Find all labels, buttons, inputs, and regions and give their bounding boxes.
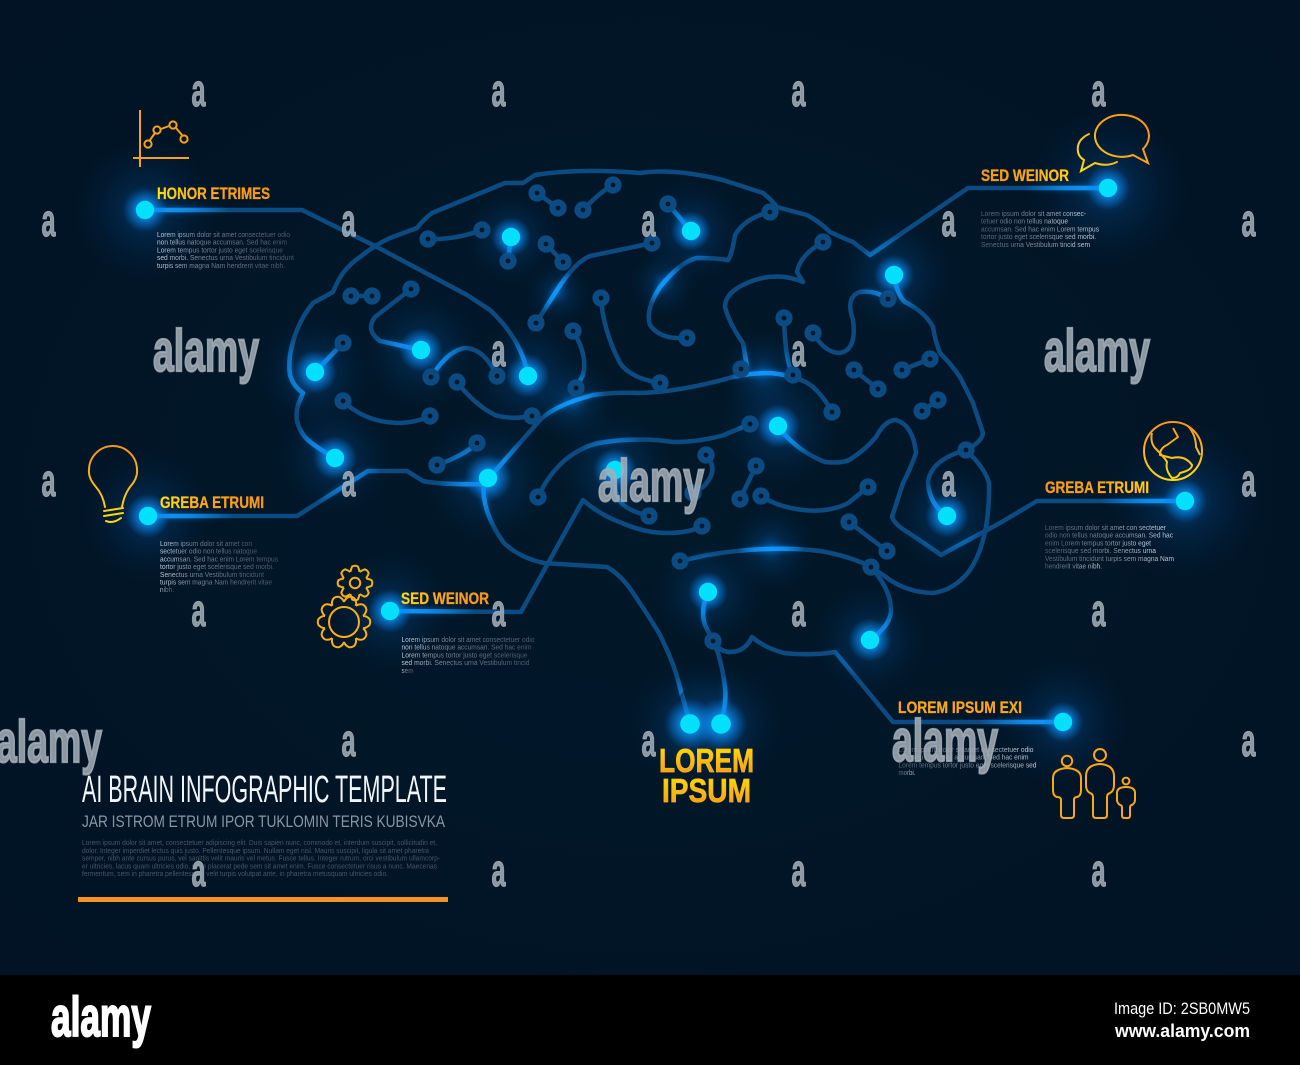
- heading: LOREM IPSUM EXI: [898, 699, 1022, 717]
- watermark: a: [792, 65, 806, 116]
- watermark: a: [342, 715, 356, 766]
- watermark: alamy: [598, 448, 704, 514]
- icon: people: [1053, 749, 1135, 818]
- watermark: alamy: [892, 708, 998, 774]
- text block: non tellus natoque accumsan. Sed hac enim: [898, 755, 1029, 762]
- watermark: a: [642, 715, 656, 766]
- orange rule: [78, 897, 448, 902]
- text block: accumsan. Sed hac enim Lorem tempus: [160, 556, 279, 563]
- text block: sectetuer odio non tellus natoque: [160, 549, 257, 556]
- text block: hendrerit vitae nibh.: [1045, 564, 1102, 570]
- text block: Lorem ipsum dolor sit amet con: [160, 541, 252, 548]
- illuminated line sections glow: [145, 171, 1185, 724]
- heading: GREBA ETRUMI: [1045, 479, 1149, 497]
- title: AI BRAIN INFOGRAPHIC TEMPLATE: [82, 769, 447, 811]
- glow halos behind the circuit: [73, 108, 1265, 788]
- center label: lorem ipsum: [659, 742, 754, 809]
- watermark: a: [492, 845, 506, 896]
- text block: sed morbi. Senectus urna Vestibulum tincidunt: [157, 255, 294, 262]
- text block: sed morbi. Senectus urna Vestibulum tincid: [402, 660, 530, 667]
- watermark: alamy: [153, 318, 259, 384]
- text block: [402, 637, 535, 675]
- text block: Vestibulum tincidunt turpis sem magna Nam: [1045, 556, 1174, 563]
- panel: sed weinor left: [318, 566, 535, 675]
- icon: line chart: [133, 110, 189, 167]
- watermark: a: [1242, 195, 1256, 246]
- watermark: a: [1242, 455, 1256, 506]
- text block: [898, 747, 1037, 777]
- watermark: a: [492, 65, 506, 116]
- watermark: a: [492, 585, 506, 636]
- text block: tortor justo eget scelerisque sed morbi.: [160, 564, 274, 571]
- description text: Lorem ipsum dolor sit amet, consectetuer adipiscing elit. Duis sapien nunc, commodo et, interdum suscipit, sollicitudin et,: [82, 840, 437, 847]
- text block: Lorem ipsum dolor sit amet consec-: [981, 211, 1086, 218]
- text block: nibh.: [160, 587, 174, 594]
- watermark: a: [942, 455, 956, 506]
- text block: Lorem ipsum dolor sit amet consectetuer odio: [898, 747, 1034, 754]
- panel: honor etrimes: [133, 110, 294, 270]
- heading: SED WEINOR: [401, 590, 489, 608]
- text block: [981, 211, 1100, 249]
- circuit terminal nodes: [338, 180, 972, 646]
- watermark: a: [1092, 585, 1106, 636]
- description text: dolor. Integer imperdiet lectus quis justo. Pellentesque ipsum. Nullam eget nisl. Mauris suscipit, ligula sit amet pharetra: [82, 848, 429, 855]
- watermark: a: [792, 325, 806, 376]
- watermark: a: [1092, 65, 1106, 116]
- illuminated line sections: [145, 171, 1185, 724]
- watermark: [0, 65, 1256, 896]
- text block: turpis sem magna Nam hendrerit vitae: [160, 580, 272, 586]
- image id: Image ID: 2SB0MW5: [1114, 999, 1250, 1018]
- text block: Lorem tempus tortor justo eget scelerisque: [402, 652, 528, 659]
- heading: HONOR ETRIMES: [157, 185, 270, 203]
- watermark: a: [192, 585, 206, 636]
- watermark: a: [642, 195, 656, 246]
- text block: Lorem tempus tortor justo eget scelerisque sed: [898, 762, 1037, 769]
- icon: globe: [1144, 422, 1202, 480]
- icon: gears: [318, 566, 372, 649]
- text block: non tellus natoque accumsan. Sed hac enim: [157, 240, 287, 247]
- text block: tetuer odio non tellus natoque: [981, 219, 1068, 226]
- subtitle: JAR ISTROM ETRUM IPOR TUKLOMIN TERIS KUBISVKA: [82, 812, 446, 831]
- brain circuit lines: [145, 171, 1185, 724]
- text block: [1045, 525, 1174, 570]
- watermark: a: [492, 325, 506, 376]
- footer logo: alamy: [51, 985, 151, 1048]
- text block: turpis sem magna Nam hendrerit vitae nibh.: [157, 263, 285, 270]
- text block: Lorem ipsum dolor sit amet consectetuer odio: [157, 232, 290, 239]
- center label: lorem ipsum: IPSUM: [662, 772, 751, 809]
- watermark: a: [42, 455, 56, 506]
- watermark: alamy: [0, 709, 102, 775]
- watermark: a: [792, 585, 806, 636]
- icon: light bulb: [89, 446, 137, 522]
- description text: semper, nibh ante cursus purus, vel sagittis velit mauris vel metus. Fusce tellus. Integer rutrum, orci vestibulum ullamcorp-: [82, 856, 440, 863]
- panel: lorem ipsum exi: [898, 699, 1135, 818]
- watermark: a: [192, 845, 206, 896]
- text block: accumsan. Sed hac enim Lorem tempus: [981, 226, 1100, 233]
- description text: [82, 840, 440, 878]
- text block: Lorem tempus tortor justo eget scelerisque: [157, 247, 283, 254]
- watermark: a: [792, 845, 806, 896]
- description text: er ultricies, lacus quam ultricies odio, vitae placerat pede sem sit amet enim. Fusce consectetuer risus a nunc. Maecenas: [82, 863, 438, 870]
- watermark: a: [342, 195, 356, 246]
- watermark: a: [942, 195, 956, 246]
- text block: enim Lorem tempus tortor justo eget: [1045, 540, 1151, 547]
- center label: lorem ipsum: LOREM: [659, 742, 754, 779]
- text block: Lorem ipsum dolor sit amet consectetuer odio: [402, 637, 535, 644]
- description text: fermentum, sem in pharetra pellentesque, velit turpis volutpat ante, in pharetra metusquam ultricies odio.: [82, 871, 388, 878]
- text block: [157, 232, 294, 270]
- glowing nodes: [136, 179, 1194, 734]
- heading: SED WEINOR: [981, 167, 1069, 185]
- panel: greba etrumi left: [89, 446, 279, 594]
- watermark: a: [1092, 845, 1106, 896]
- glowing node halos: [123, 166, 1207, 750]
- watermark: a: [192, 65, 206, 116]
- footer bar text: [51, 985, 1250, 1048]
- panel: greba etrumi right: [1045, 422, 1202, 570]
- heading: GREBA ETRUMI: [160, 494, 264, 512]
- text block: non tellus natoque accumsan. Sed hac enim: [402, 645, 532, 652]
- icon: speech bubbles: [1078, 115, 1149, 171]
- text block: [160, 541, 279, 594]
- text block: odio non tellus natoque accumsan. Sed hac: [1045, 533, 1174, 540]
- panel: sed weinor right: [981, 115, 1149, 249]
- text block: Senectus urna Vestibulum tincidunt: [160, 572, 264, 579]
- text block: tortor justo eget scelerisque sed morbi.: [981, 234, 1096, 241]
- watermark: a: [342, 455, 356, 506]
- website: www.alamy.com: [1114, 1021, 1250, 1041]
- text block: sem: [402, 668, 414, 675]
- text block: scelerisque sed morbi. Senectus urna: [1045, 548, 1156, 555]
- title block: [78, 769, 448, 902]
- text block: Senectus urna Vestibulum tincid sem: [981, 242, 1090, 249]
- text block: morbi.: [898, 770, 916, 777]
- watermark: a: [42, 195, 56, 246]
- watermark: a: [1242, 715, 1256, 766]
- text block: Lorem ipsum dolor sit amet con sectetuer: [1045, 525, 1167, 532]
- watermark: alamy: [1044, 318, 1150, 384]
